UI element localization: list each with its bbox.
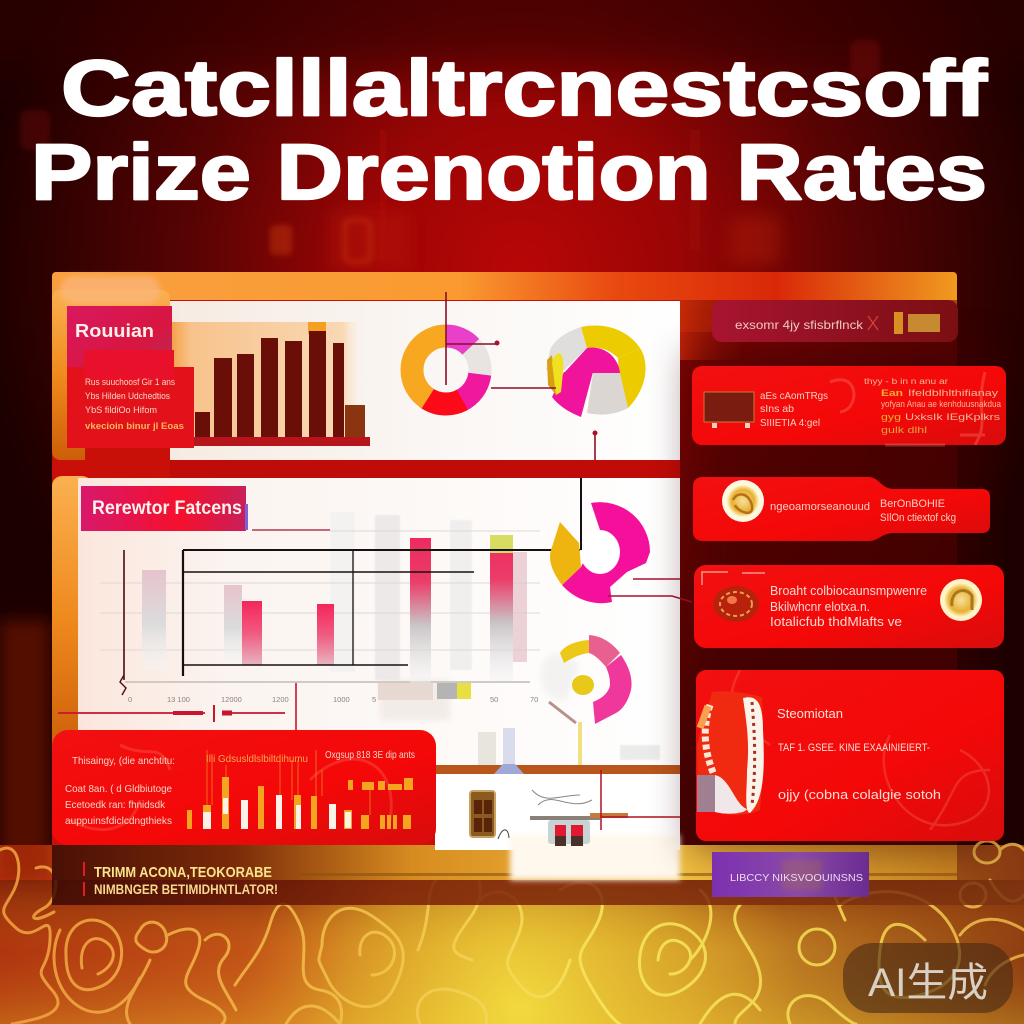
footnote text: NIMBNGER BETIMIDHNTLATOR!	[94, 881, 278, 897]
axis labels: 50	[490, 695, 498, 704]
icon: prize box	[470, 791, 509, 839]
bar chart: dark bars	[170, 322, 370, 446]
summary text: Oxgsup 818 3E dip ants	[325, 749, 415, 761]
leader lines right	[608, 579, 692, 602]
red scale line	[58, 683, 296, 732]
bars	[142, 535, 527, 683]
card 2: red info: SIIIETIA 4:gel	[760, 417, 820, 429]
panel: lower white panel	[435, 770, 680, 880]
leader dots	[494, 340, 598, 436]
summary text: Thisaingy, (die anchtitu:	[72, 755, 175, 767]
label card: Rouuian: Ybs Hilden Udchedtios	[85, 391, 170, 401]
card 5: prize can: ojjy (cobna colalgie sotoh	[778, 787, 941, 802]
brown divider	[435, 764, 680, 774]
card 1: dark red	[712, 300, 958, 342]
donut chart 1	[412, 336, 480, 404]
card 4: ball and medal	[694, 565, 1004, 648]
axis labels: 70	[530, 695, 538, 704]
card 4: ball and medal: Iotalicfub thdMlafts ve	[770, 615, 902, 629]
mini bar chart	[187, 750, 413, 829]
footnote text: TRIMM ACONA,TEOKORABE	[94, 864, 272, 881]
card 5: prize can: Steomiotan	[777, 707, 843, 721]
icon: gold bars	[894, 312, 940, 334]
axis labels: 12000	[221, 695, 242, 704]
summary text	[65, 749, 415, 827]
donut chart 3	[550, 478, 650, 603]
label card: Rouuian: Rouuian	[75, 321, 154, 341]
card 2: red info: Ean	[881, 388, 903, 399]
card 2: red info: aEs cAomTRgs	[760, 390, 828, 402]
card 2: red info	[692, 366, 1006, 445]
card 4: ball and medal: Broaht colbiocaunsmpwenre	[770, 584, 927, 598]
purple tag	[712, 852, 869, 897]
right dark glow	[690, 350, 990, 850]
card 1: dark red: exsomr 4jy sfisbrflnck	[735, 318, 864, 332]
panel: top chart area	[170, 292, 680, 460]
title: Prize Drenotion Rates	[31, 127, 987, 216]
title: Catclllaltrcnestcsoff	[61, 43, 988, 132]
donut chart 2	[546, 326, 646, 417]
purple tag: LIBCCY NIKSVOOUINSNS	[730, 872, 863, 884]
card 2: red info: Ifeldblhlthifianay	[908, 388, 998, 399]
summary text: Coat 8an. ( d Gldbiutoge	[65, 783, 172, 795]
icon: gold coin	[940, 579, 982, 621]
card 2: red info: gyg	[881, 412, 901, 423]
axis swatches	[378, 683, 471, 700]
icon: prize can	[697, 691, 764, 815]
watermark badge: AI生成	[868, 961, 988, 1005]
card 2: red info: sIns ab	[760, 403, 794, 415]
card 3: medal: BerOnBOHIE	[880, 498, 945, 510]
summary text: Illi Gdsusldlslbiltdihumu	[206, 753, 308, 765]
donut chart 4	[541, 635, 632, 765]
label card: Rouuian: YbS fildiOo Hifom	[85, 405, 157, 415]
card 2: red info: UxksIk IEgKplkrs	[905, 412, 1000, 423]
label card: Rouuian: Rus suuchoosf Gir 1 ans	[85, 377, 175, 387]
title	[31, 43, 988, 216]
card 5: prize can: TAF 1. GSEE. KINE EXAAINIEIERT-	[778, 742, 930, 754]
summary text: auppuinsfdiclcdngthieks	[65, 815, 172, 827]
card 2: red info: yofyan Anau ae kenhduusnakdua	[881, 399, 1002, 410]
chart gridlines and axis	[100, 531, 540, 682]
card 3: medal: SIlOn ctiextof ckg	[880, 512, 956, 524]
icon: prize machine	[530, 790, 628, 846]
connector	[170, 460, 680, 478]
axis labels: 1000	[333, 695, 350, 704]
label card: Rouuian	[67, 306, 194, 448]
icon: dark screen	[704, 392, 754, 428]
axis labels: 1200	[272, 695, 289, 704]
icon: gold medal	[722, 480, 764, 522]
watermark badge	[843, 943, 1013, 1013]
chart frame lines	[120, 478, 581, 695]
bottom ornamental pattern	[0, 620, 1024, 1024]
axis labels: 0	[128, 695, 132, 704]
heading: reward factors	[81, 486, 248, 531]
card 3: medal	[693, 477, 990, 541]
summary text: Ecetoedk ran: fhnidsdk	[65, 799, 166, 811]
axis labels	[128, 695, 538, 704]
card 2: red info: gulk dlhl	[881, 425, 927, 436]
heading: reward factors: Rerewtor Fatcens	[92, 498, 242, 519]
card: bottom left red summary	[52, 730, 436, 845]
panel: reward factors chart	[58, 478, 692, 766]
card 4: ball and medal: Bkilwhcnr elotxa.n.	[770, 600, 870, 614]
label card: Rouuian: vkecioin binur jl Eoas	[85, 421, 184, 431]
dashboard backing panel	[52, 272, 1024, 905]
axis labels: 13 100	[167, 695, 190, 704]
ghost columns	[478, 728, 660, 766]
axis labels: 5	[372, 695, 376, 704]
icon: red ball	[713, 586, 759, 622]
card 3: medal: ngeoamorseanouud	[770, 501, 870, 513]
card 5: prize can	[696, 670, 1004, 841]
card 2: red info: thyy - b in n anu ar	[864, 377, 948, 386]
leader lines	[446, 292, 595, 460]
footnote text	[83, 862, 278, 897]
